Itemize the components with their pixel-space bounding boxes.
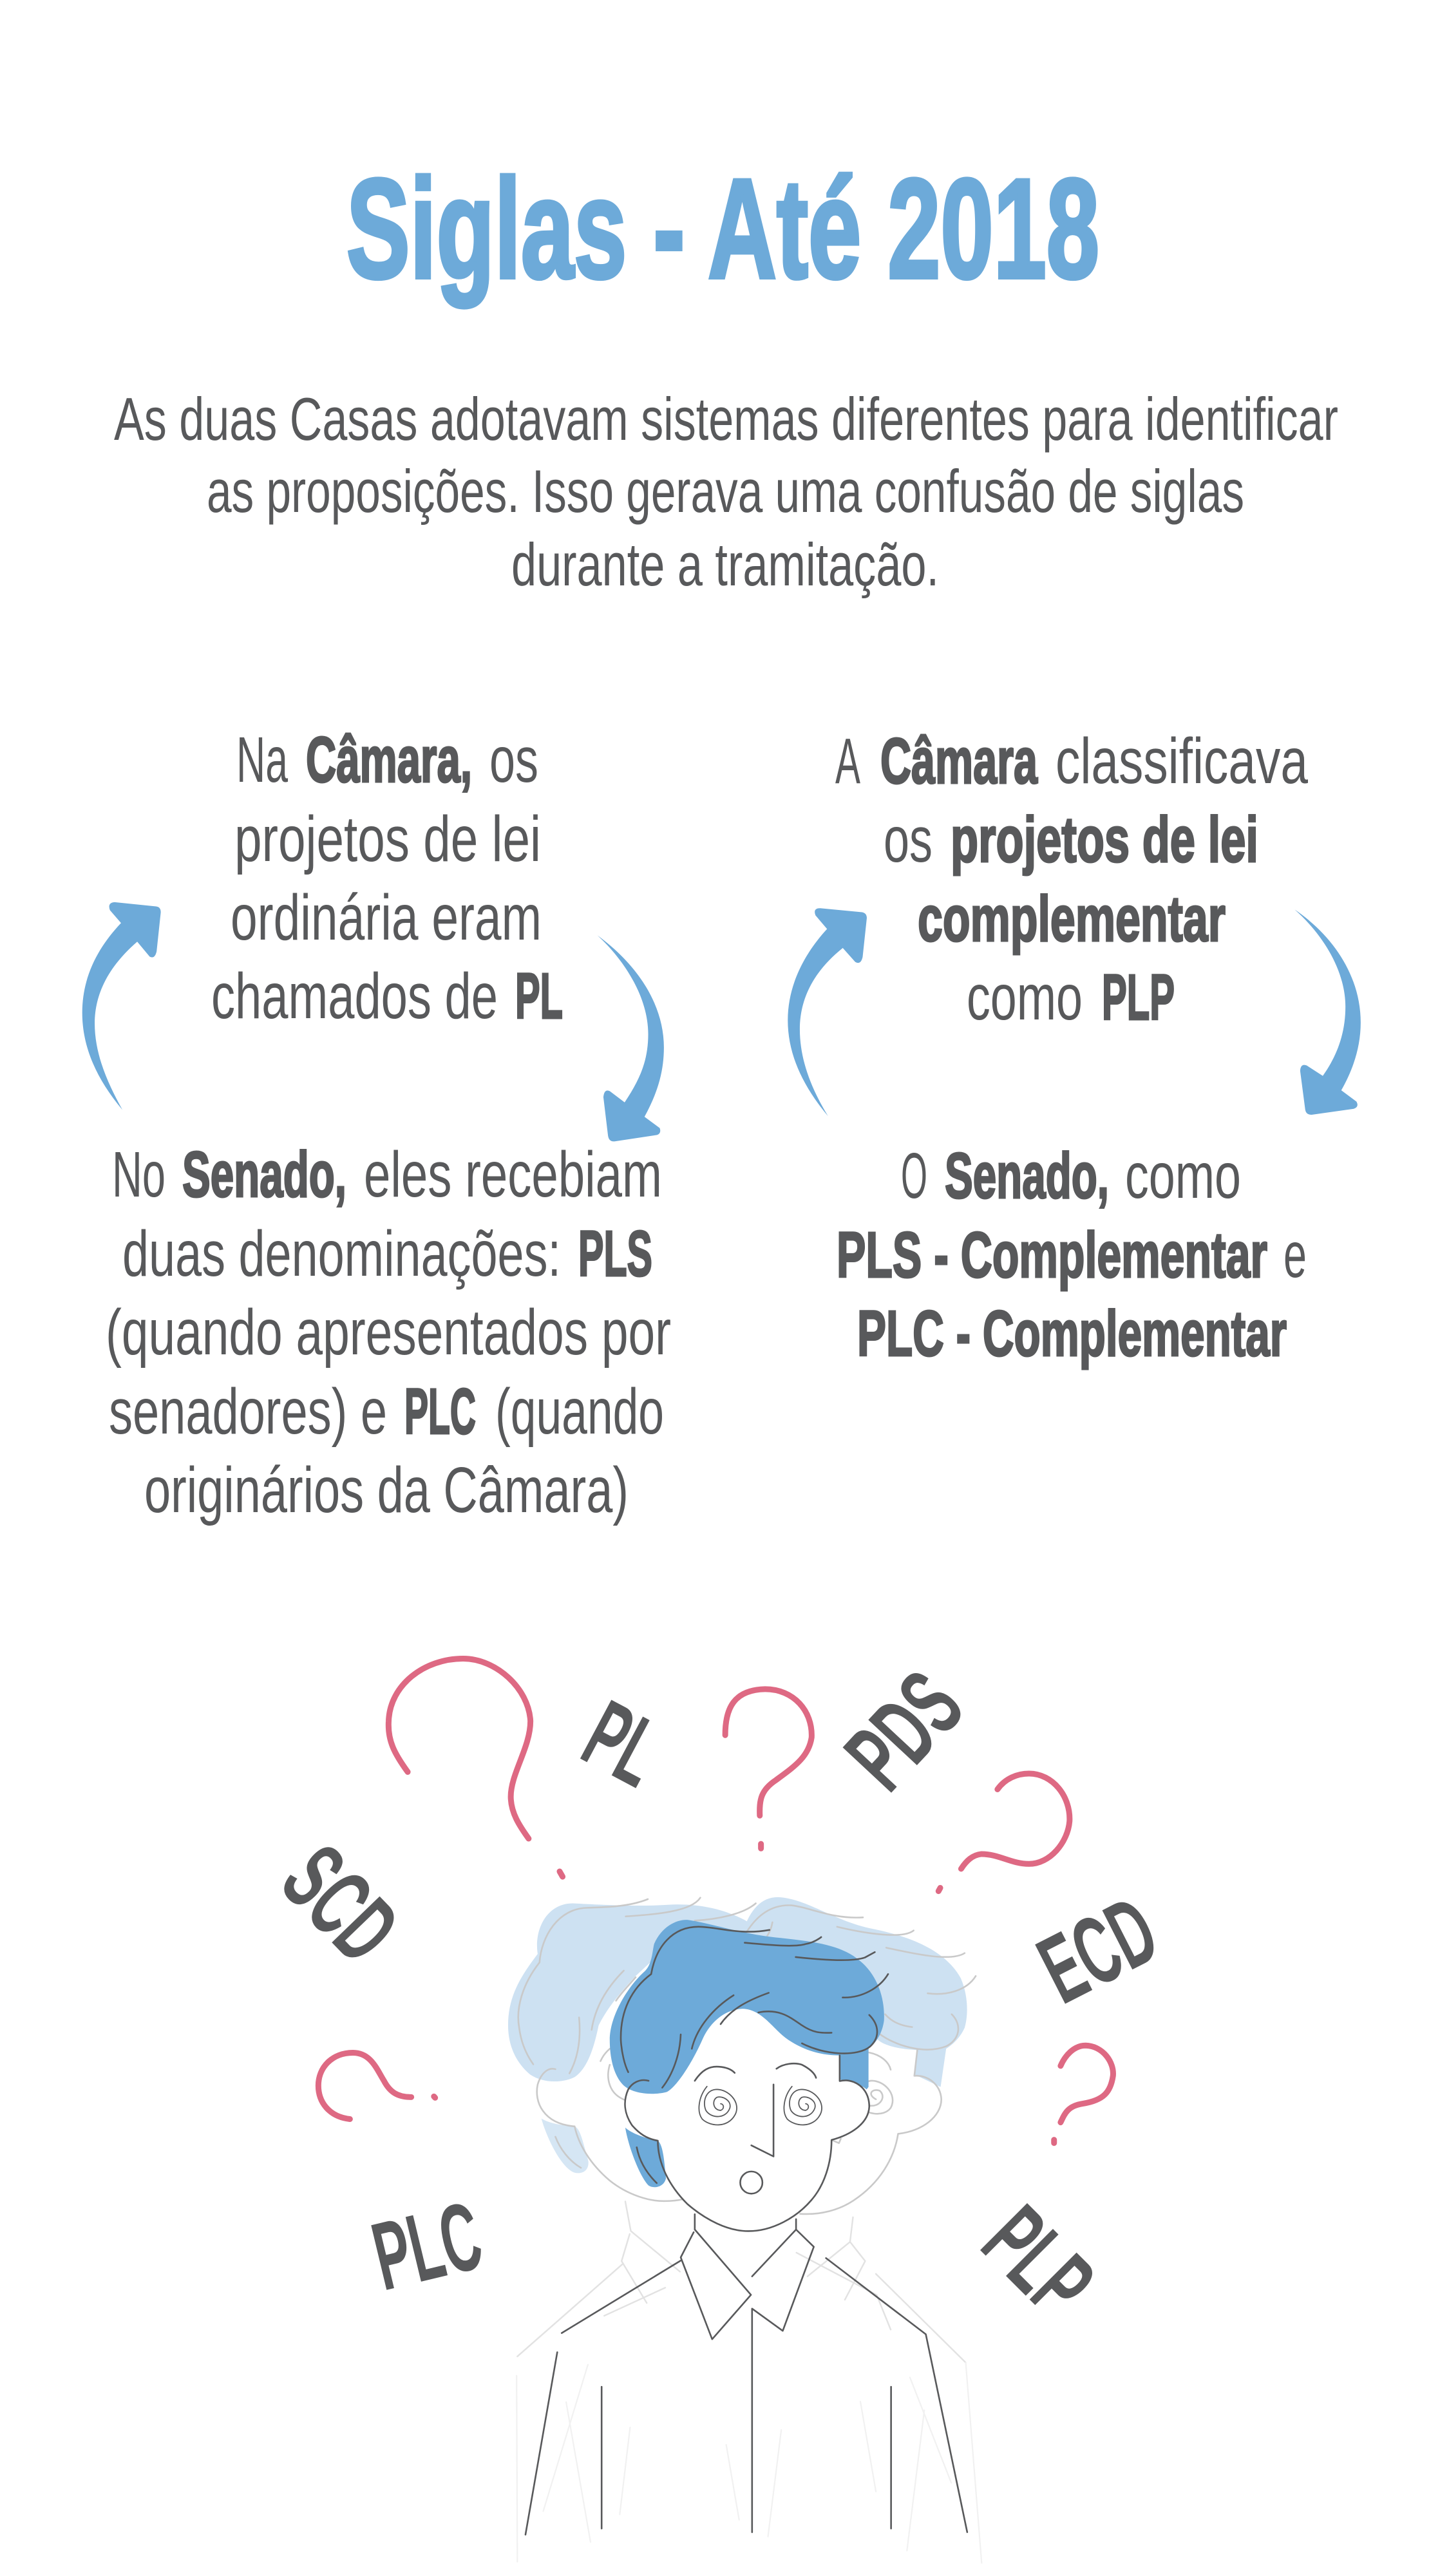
- panel: left text, projetos de lei ordinária, Câmara: Câmara,: [306, 724, 472, 796]
- panel: left text, projetos de lei ordinária, Senado: (quando: [495, 1376, 664, 1448]
- icon: large question mark: [388, 1659, 563, 1877]
- arrows: left cycle: [82, 902, 664, 1141]
- panel: left text, projetos de lei ordinária, Senado: senadores) e: [109, 1376, 387, 1448]
- panel: right text, projetos de lei complementar, Câmara: os: [884, 804, 933, 876]
- panel: left text, projetos de lei ordinária, Senado: PLC: [404, 1376, 476, 1448]
- panel: left text, projetos de lei ordinária, Senado: duas denominações:: [122, 1218, 561, 1290]
- mouth: [740, 2172, 762, 2193]
- arrows: right cycle: [788, 908, 1361, 1116]
- panel: right text, projetos de lei complementar, Senado: [837, 1140, 1307, 1370]
- question marks: [318, 1659, 1113, 2143]
- panel: right text, projetos de lei complementar, Câmara: complementar: [918, 883, 1226, 955]
- arrow: left curving up: [82, 902, 161, 1110]
- arrow: right curving down: [1294, 909, 1361, 1115]
- panel: left text, projetos de lei ordinária, Senado: (quando apresentados por: [106, 1296, 671, 1368]
- panel: right text, projetos de lei complementar, Senado: como: [1125, 1140, 1241, 1212]
- intro text: durante a tramitação.: [511, 531, 939, 598]
- panel: right text, projetos de lei complementar, Senado: O: [901, 1140, 927, 1212]
- floating acronyms: [262, 1651, 1173, 2337]
- panel: left text, projetos de lei ordinária, Senado: [106, 1139, 671, 1526]
- label: PLP: PLP: [963, 2186, 1115, 2337]
- label: SCD: SCD: [262, 1825, 419, 1982]
- panel: right text, projetos de lei complementar, Câmara: Câmara: [880, 725, 1038, 797]
- right spiral eye: [784, 2087, 822, 2125]
- panel: right text, projetos de lei complementar, Câmara: projetos de lei: [951, 804, 1258, 876]
- panel: right text, projetos de lei complementar, Câmara: como: [967, 961, 1083, 1034]
- nose: [752, 2085, 773, 2157]
- panel: left text, projetos de lei ordinária, Câmara: PL: [515, 960, 563, 1032]
- faint ghost shirt lines: [516, 2363, 981, 2563]
- icon: lower right question mark: [1054, 2045, 1113, 2143]
- panel: left text, projetos de lei ordinária, Senado: eles recebiam: [364, 1139, 662, 1211]
- title: Siglas - Até 2018: [346, 149, 1099, 308]
- ghost hair: [508, 1897, 967, 2173]
- ghost head outlines: [518, 1898, 976, 2214]
- main face fill: [625, 2016, 869, 2231]
- eyebrows: [695, 2063, 816, 2081]
- label: ECD: ECD: [1022, 1875, 1173, 2024]
- panel: left text, projetos de lei ordinária, Câmara: projetos de lei: [234, 803, 541, 875]
- panel: left text, projetos de lei ordinária, Câmara: ordinária eram: [231, 882, 542, 954]
- hair strands: [621, 1927, 888, 2183]
- icon: lower left question mark: [318, 2053, 435, 2119]
- panel: left text, projetos de lei ordinária, Senado: PLS: [578, 1218, 652, 1290]
- panel: right text, projetos de lei complementar, Câmara: [835, 725, 1308, 1034]
- panel: right text, projetos de lei complementar, Senado: e: [1283, 1219, 1307, 1291]
- icon: centre question mark: [725, 1689, 811, 1848]
- icon: right question mark: [938, 1774, 1070, 1891]
- arrow: left curving up: [788, 908, 867, 1116]
- panel: right text, projetos de lei complementar, Câmara: PLP: [1102, 961, 1175, 1034]
- main hair: [610, 1920, 884, 2187]
- panel: left text, projetos de lei ordinária, Câmara: os: [489, 724, 538, 796]
- panel: right text, projetos de lei complementar, Câmara: A: [835, 725, 860, 797]
- shirt and collar line art: [526, 2214, 967, 2535]
- arrow: right curving down: [598, 935, 664, 1141]
- panel: left text, projetos de lei ordinária, Senado: No: [112, 1139, 166, 1211]
- label: PLC: PLC: [363, 2181, 491, 2311]
- ghost shirt lines: [517, 2201, 966, 2363]
- panel: left text, projetos de lei ordinária, Senado: originários da Câmara): [144, 1454, 629, 1526]
- panel: left text, projetos de lei ordinária, Câmara: chamados de: [211, 960, 498, 1032]
- illustration: confused man: [508, 1897, 981, 2563]
- label: PL: PL: [567, 1680, 678, 1807]
- label: PDS: PDS: [825, 1651, 983, 1810]
- face outline: [625, 2056, 869, 2231]
- intro text: [114, 385, 1338, 598]
- panel: left text, projetos de lei ordinária, Senado: Senado,: [182, 1139, 346, 1211]
- panel: left text, projetos de lei ordinária, Câmara: Na: [236, 724, 288, 796]
- panel: right text, projetos de lei complementar, Câmara: classificava: [1056, 725, 1308, 797]
- panel: left text, projetos de lei ordinária, Câmara: [211, 724, 563, 1032]
- left spiral eye: [699, 2087, 737, 2125]
- main head line art: [621, 1927, 888, 2231]
- panel: right text, projetos de lei complementar, Senado: Senado,: [945, 1140, 1109, 1212]
